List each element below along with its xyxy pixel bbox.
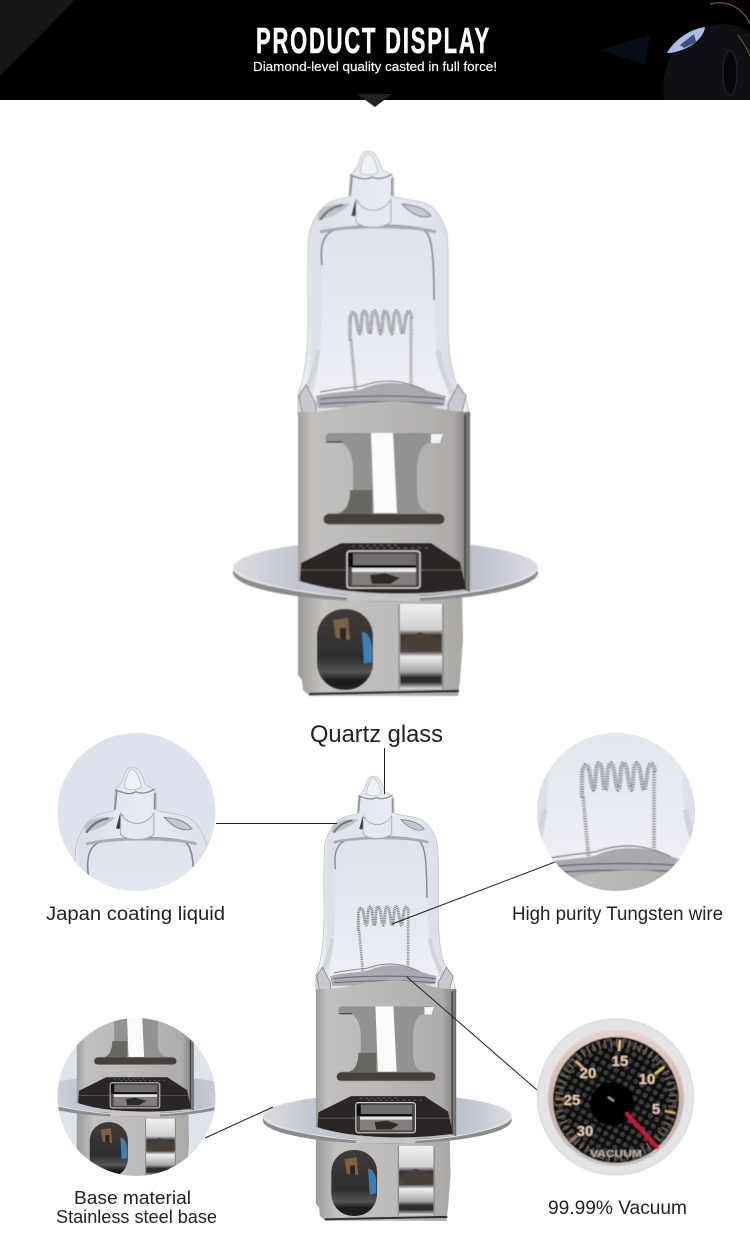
gauge numbers: 25	[564, 1092, 580, 1109]
gauge numbers: 10	[639, 1071, 655, 1088]
gauge numbers: 15	[612, 1053, 628, 1070]
gauge label: VACUUM	[590, 1148, 642, 1160]
gauge numbers: 5	[652, 1101, 660, 1118]
label: Japan coating liquid: Japan coating liquid	[46, 904, 225, 925]
title: PRODUCT DISPLAY	[256, 20, 491, 61]
main bulb photo	[233, 151, 538, 696]
heading: Quartz glass: Quartz glass	[310, 721, 443, 748]
label: Stainless steel base: Stainless steel base	[56, 1206, 217, 1227]
gauge numbers: 20	[580, 1065, 596, 1082]
car photo	[600, 3, 750, 100]
annotated bulb	[263, 776, 512, 1221]
label: Base material: Base material	[74, 1187, 191, 1208]
label: High purity Tungsten wire: High purity Tungsten wire	[512, 904, 723, 925]
leader lines	[205, 748, 555, 1138]
callout circle: vacuum gauge	[538, 1019, 694, 1175]
callout circle: glass tip	[58, 733, 216, 891]
header pointer	[357, 94, 392, 107]
callout circle: stainless base	[58, 1018, 216, 1176]
callout circle: tungsten filament	[537, 733, 695, 891]
label: 99.99% Vacuum: 99.99% Vacuum	[548, 1198, 687, 1219]
header banner	[0, 0, 750, 100]
subtitle: Diamond-level quality casted in full force!	[253, 60, 497, 74]
gauge numbers: 30	[577, 1123, 593, 1140]
gauge needle	[627, 1114, 657, 1147]
gauge numbers	[564, 1053, 660, 1140]
